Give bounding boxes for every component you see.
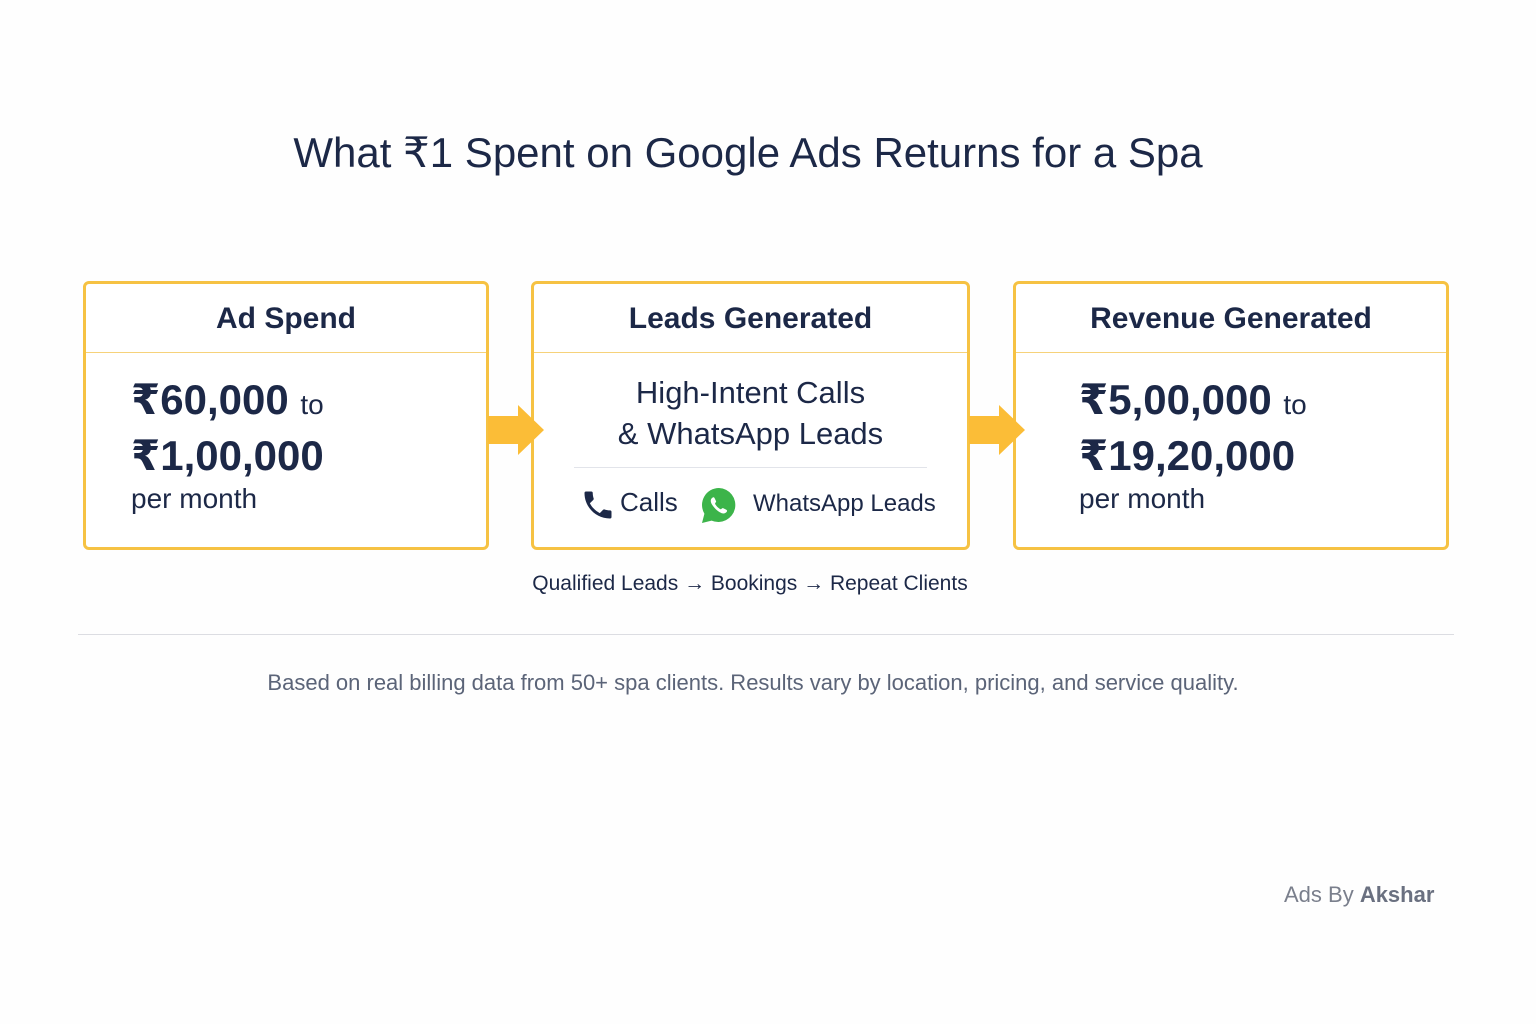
text: ad spend range <box>131 376 324 514</box>
heading: leads <box>534 284 967 353</box>
text: revenue range: ₹5,00,000 to <box>1079 376 1307 423</box>
brand: Ads By Akshar <box>1284 882 1434 907</box>
title: What ₹1 Spent on Google Ads Returns for a Spa <box>293 129 1203 176</box>
text: high intent: High-Intent Calls <box>636 375 865 410</box>
heading: revenue: Revenue Generated <box>1090 302 1372 335</box>
text: revenue range: per month <box>1079 483 1205 514</box>
heading: ad spend: Ad Spend <box>216 302 356 335</box>
text: ad spend range: ₹60,000 to <box>131 376 324 423</box>
text: high intent <box>618 375 883 451</box>
text: ad spend range: ₹1,00,000 <box>131 432 324 479</box>
icon: whatsapp <box>702 488 736 523</box>
panel: revenue <box>1013 281 1449 550</box>
text: revenue range: ₹19,20,000 <box>1079 432 1295 479</box>
panel: leads generated <box>531 281 970 550</box>
arrow 2 <box>969 405 1025 455</box>
arrow 1 <box>488 405 544 455</box>
text: funnel caption: Qualified Leads → Bookings → Repeat Clients <box>532 572 968 595</box>
text: revenue range <box>1079 376 1307 514</box>
text: whatsapp leads: WhatsApp Leads <box>753 490 936 517</box>
panel: ad spend <box>83 281 489 550</box>
heading: ad spend <box>86 284 486 353</box>
text: ad spend range: per month <box>131 483 257 514</box>
icon: phone <box>584 492 612 518</box>
heading: leads: Leads Generated <box>629 302 872 335</box>
text: high intent: & WhatsApp Leads <box>618 416 883 451</box>
text: footnote: Based on real billing data from 50+ spa clients. Results vary by location, pricing, and service quality. <box>267 670 1239 695</box>
text: calls: Calls <box>620 487 678 517</box>
heading: revenue <box>1016 284 1446 353</box>
